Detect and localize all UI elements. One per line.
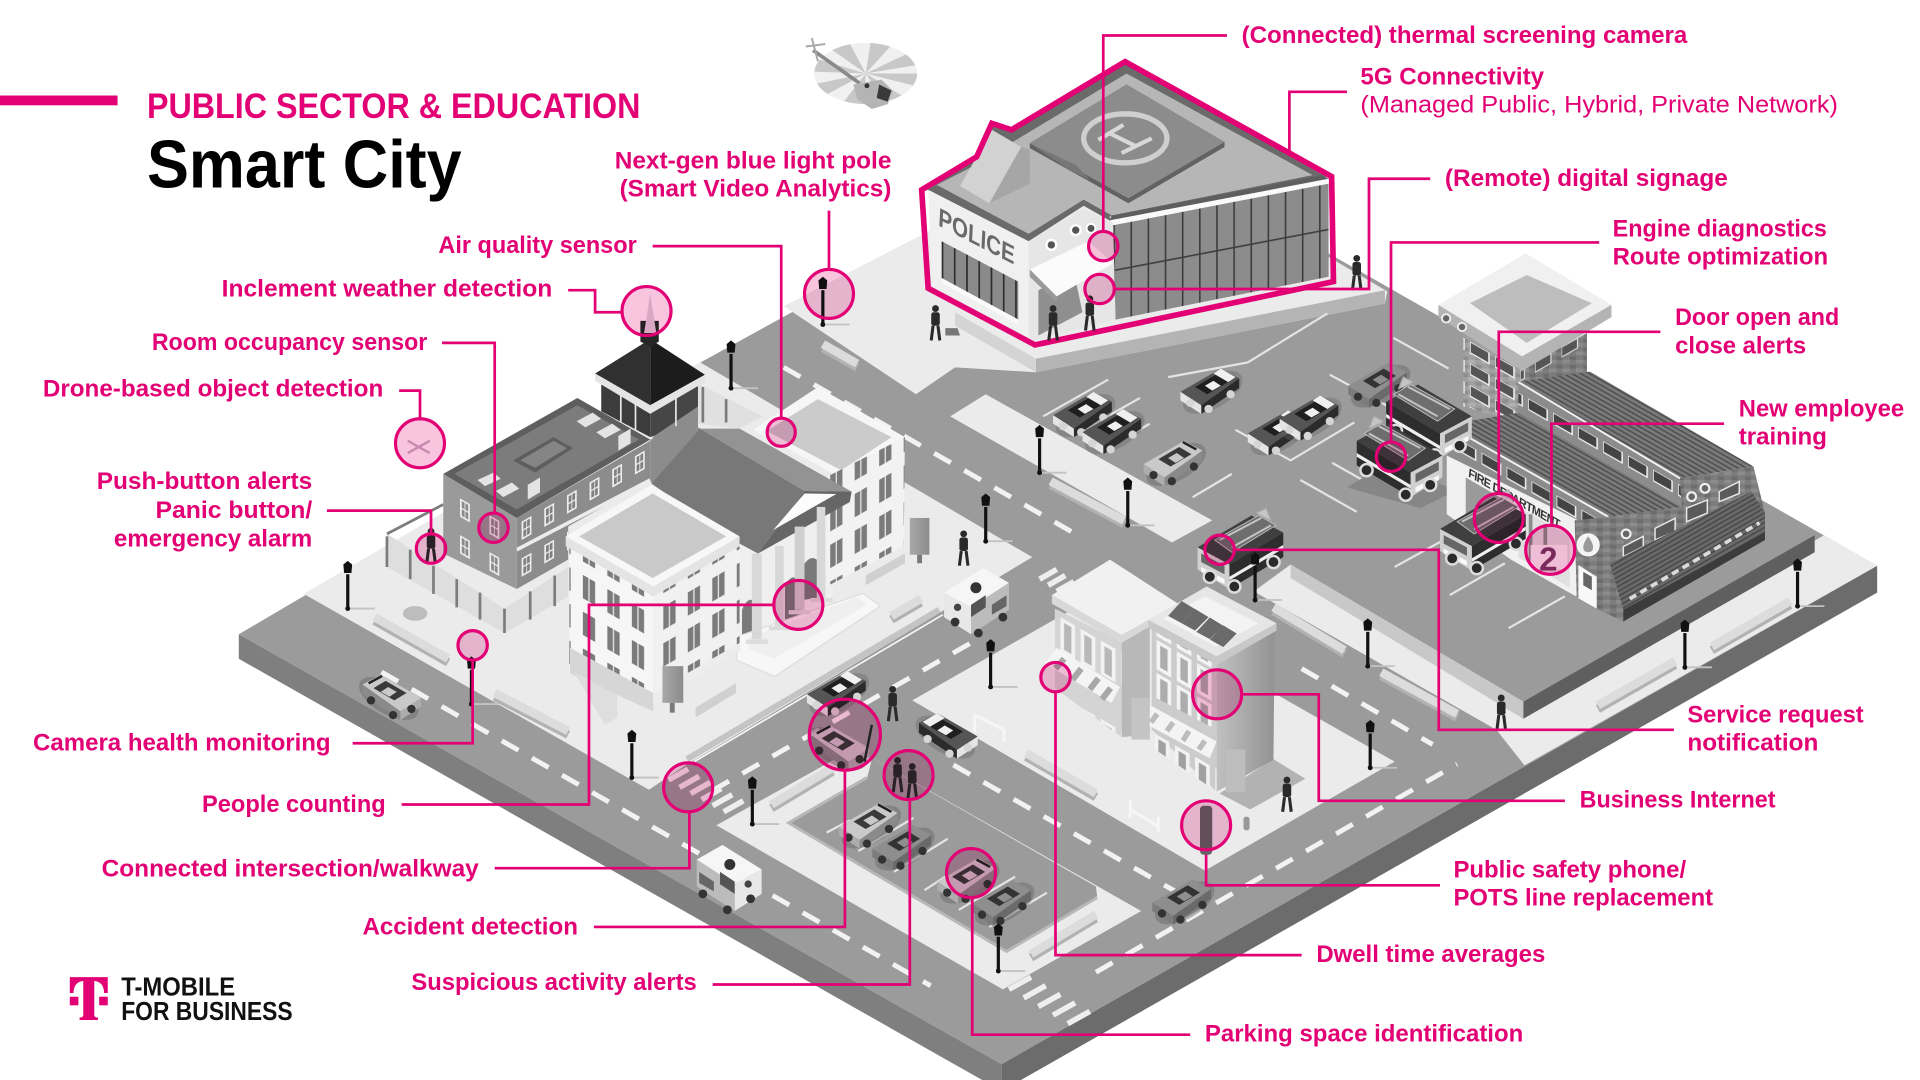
callout: public safety phone: [1182, 801, 1713, 912]
right shop wall: [1152, 628, 1217, 792]
callout: accident detection: Accident detection: [362, 913, 578, 940]
low benches: [866, 553, 905, 585]
helipad: [1030, 84, 1224, 203]
callout: next-gen blue light pole: Next-gen blue light pole: [615, 147, 891, 174]
right wing roof: [753, 387, 905, 480]
sidewalk cabinets: [1131, 698, 1150, 740]
rooftop units: [478, 413, 631, 500]
callout: suspicious activity alerts: [411, 751, 933, 996]
callout: 5G connectivity: 5G Connectivity: [1360, 63, 1544, 90]
fire station: [1438, 253, 1765, 622]
logo wordmark: T-MOBILE: [121, 974, 235, 1002]
callout: service request notification: notification: [1687, 730, 1818, 757]
police station: [922, 62, 1333, 345]
connecting gray wing: [650, 427, 700, 483]
callout: 5G connectivity: [1289, 63, 1838, 153]
callout: parking space identification: [947, 849, 1523, 1047]
callout: air quality sensor: Air quality sensor: [438, 232, 637, 259]
tower roof: [1438, 253, 1611, 356]
callout: room occupancy sensor: [152, 329, 508, 542]
upper window band: [1518, 382, 1682, 507]
callout: room occupancy sensor: Room occupancy sensor: [152, 329, 428, 356]
callout: new employee training: training: [1739, 423, 1827, 450]
city blocks and sidewalks: [304, 133, 1877, 989]
fire lot shadow under truck: [1347, 465, 1457, 508]
callout: connected thermal screening camera: [1089, 22, 1688, 261]
callout: next-gen blue light pole: [615, 147, 891, 318]
fire department sign: FIRE DEPARTMENT: [1468, 465, 1561, 532]
portico steps: [737, 593, 880, 677]
central gray roof: [700, 429, 852, 492]
gray school left wall: [443, 474, 517, 589]
callout: drone-based object detection: Drone-based object detection: [43, 376, 383, 403]
callout: air quality sensor: [438, 232, 795, 446]
callout: push-button alerts and panic button: emergency alarm: [114, 526, 312, 553]
left shop wall: [1055, 609, 1122, 737]
callout: people counting: [202, 580, 823, 818]
left civic building with tower: [387, 321, 929, 725]
callout: suspicious activity alerts: Suspicious activity alerts: [411, 969, 697, 996]
solar panels: [1168, 601, 1237, 647]
street lamps: [343, 277, 1824, 973]
callout: inclement weather detection: Inclement weather detection: [222, 275, 552, 302]
road lane markings: [381, 367, 1457, 986]
tower black roof: [595, 339, 650, 405]
right awning: [1142, 705, 1217, 758]
callout: engine diagnostics and route optimization: Engine diagnostics: [1613, 215, 1827, 242]
callout: connected intersection/walkway: [102, 763, 713, 883]
lower shed roof: [1610, 492, 1765, 610]
callout: door open and close alerts: [1474, 304, 1839, 542]
fence posts: [387, 387, 726, 633]
right wing wall: [827, 437, 905, 587]
callout: remote digital signage: (Remote) digital signage: [1445, 165, 1728, 192]
gable box: [960, 130, 1021, 203]
left wing walls: [569, 546, 653, 711]
title: Smart City: [147, 127, 462, 202]
callout: next-gen blue light pole: (Smart Video Analytics): [620, 176, 891, 203]
utility boxes: [662, 666, 683, 703]
police roof rim: [927, 64, 1330, 241]
callout: engine diagnostics and route optimization: [1376, 215, 1828, 471]
crosswalks: [669, 569, 1090, 1024]
benches: [975, 715, 1158, 833]
police glass wall: [1113, 184, 1329, 320]
helicopter: [806, 38, 917, 109]
arched windows: [742, 558, 818, 647]
callout: 5G connectivity: (Managed Public, Hybrid, Private Network): [1360, 92, 1838, 119]
callout: public safety phone: Public safety phone/: [1453, 856, 1686, 883]
rear perimeter fence: [698, 383, 763, 429]
callout: connected intersection/walkway: Connected intersection/walkway: [102, 856, 479, 883]
callout: business internet: [1193, 670, 1776, 814]
callout: new employee training: New employee: [1739, 395, 1904, 422]
callout: dwell time averages: [1041, 662, 1545, 968]
callout: remote digital signage: [1085, 165, 1728, 304]
callout: door open and close alerts: close alerts: [1675, 332, 1806, 359]
gray school roof: [443, 398, 650, 518]
end wall windows: [1623, 482, 1739, 557]
right wing portico wall: [740, 490, 833, 643]
hydrant: [1243, 817, 1250, 830]
white gable: [773, 493, 836, 530]
left shop roof: [1052, 560, 1178, 635]
callout: new employee training: [1526, 395, 1904, 579]
police pink outline: [922, 62, 1333, 345]
people: [427, 255, 1506, 812]
bay number 2 background: [1531, 545, 1567, 569]
parking lots and curbs: [687, 290, 1815, 951]
helicopter tail: [813, 50, 860, 83]
police roof: [937, 73, 1313, 234]
flame emblem: [1577, 533, 1600, 557]
building shadow: [1220, 759, 1305, 809]
callout: connected thermal screening camera: (Connected) thermal screening camera: [1242, 22, 1688, 49]
station stone end wall: [1575, 467, 1765, 622]
section heading: PUBLIC SECTOR & EDUCATION: [147, 86, 640, 126]
callout: drone-based object detection: [43, 376, 444, 468]
central commercial building: [975, 560, 1305, 833]
front perimeter fence: [387, 534, 568, 633]
callout: camera health monitoring: [33, 631, 487, 757]
callout: accident detection: [362, 699, 880, 940]
police facade: [928, 190, 1029, 337]
parking space lines: [827, 313, 1565, 927]
front wall: [1447, 425, 1608, 596]
street benches and planters: [375, 344, 1790, 958]
callout: push-button alerts and panic button: Panic button/: [156, 497, 312, 524]
police cars and other vehicles: [352, 356, 1526, 934]
callout: parking space identification: Parking space identification: [1205, 1020, 1523, 1047]
callout: service request notification: Service request: [1687, 701, 1864, 728]
helipad marking: [1084, 114, 1167, 163]
left awning: [1045, 648, 1120, 703]
logo: FOR BUSINESS: [121, 998, 293, 1026]
callout: dwell time averages: Dwell time averages: [1316, 941, 1545, 968]
left wing roof: [566, 485, 740, 587]
callout: push-button alerts and panic button: Push-button alerts: [97, 468, 312, 495]
callout: people counting: People counting: [202, 791, 386, 818]
lower long roof: [1447, 413, 1682, 517]
callout: service request notification: [1205, 535, 1864, 757]
emblem drop: [1583, 536, 1593, 552]
city platform: [239, 133, 1877, 1080]
callout: camera health monitoring: Camera health monitoring: [33, 730, 331, 757]
callout: door open and close alerts: Door open and: [1675, 304, 1839, 331]
gray school right wall: [517, 441, 650, 589]
right shop roof: [1148, 587, 1277, 657]
logo: [70, 974, 293, 1026]
callout: new employee training: 2: [1539, 542, 1558, 579]
upper long roof: [1518, 372, 1753, 478]
callout: engine diagnostics and route optimization: Route optimization: [1613, 243, 1828, 270]
station door: [1578, 565, 1597, 609]
tower walls: [1463, 334, 1521, 422]
helicopter body: [853, 80, 893, 109]
police entrance: [1029, 209, 1116, 340]
header accent bar: [0, 96, 118, 105]
callout: public safety phone: POTS line replacement: [1453, 885, 1713, 912]
callout: inclement weather detection: [222, 275, 671, 336]
portico columns: [752, 553, 762, 639]
garage bays: [1466, 478, 1506, 549]
callout: push-button alerts and panic button: [97, 468, 446, 563]
tower walls: [601, 384, 650, 437]
callout: business internet: Business Internet: [1580, 787, 1776, 814]
logo mark: [70, 977, 108, 1020]
wall mounted units: [1622, 484, 1709, 538]
police sign: POLICE: [938, 203, 1015, 271]
rotor disc: [814, 43, 917, 104]
ground disc: [403, 606, 427, 621]
